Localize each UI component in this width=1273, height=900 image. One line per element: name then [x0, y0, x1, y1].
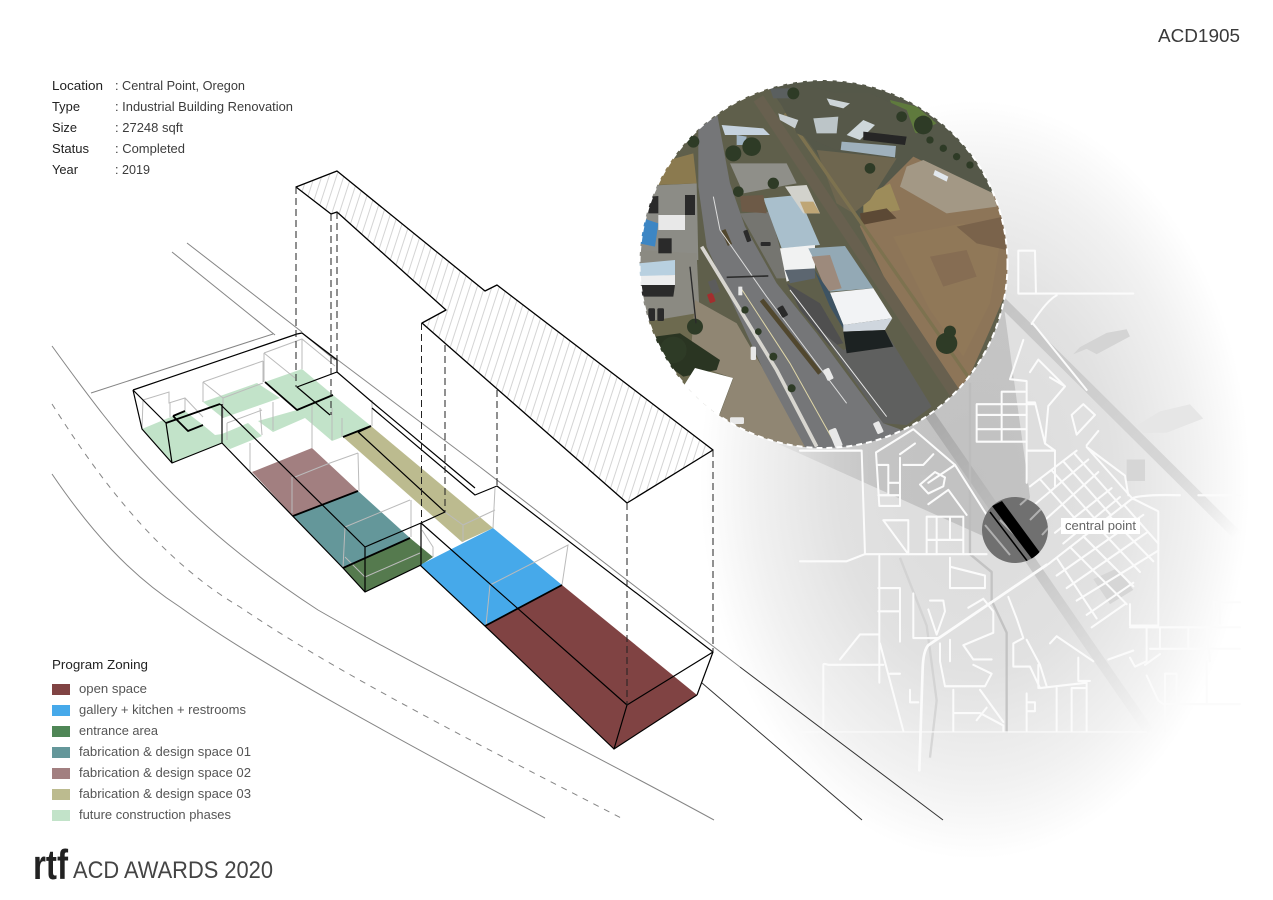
project information: Location	[52, 78, 103, 93]
dashed projection lines	[296, 187, 713, 705]
site context lines	[52, 243, 943, 820]
project information: : Completed	[115, 141, 185, 156]
zone: fabrication and design space 02	[252, 448, 358, 516]
legend item: entrance area: entrance area	[79, 723, 159, 738]
legend item: fabrication 02: fabrication & design space 02	[79, 765, 251, 780]
project information: Type	[52, 99, 80, 114]
map label: central point: central point	[1065, 519, 1137, 533]
aerial photograph	[640, 80, 1008, 449]
building outline	[133, 333, 713, 749]
map highways and creek	[900, 300, 1237, 758]
legend item: fabrication 03: fabrication & design space 03	[79, 786, 251, 801]
project information: Size	[52, 120, 77, 135]
location marker	[982, 497, 1048, 563]
legend item: open space: open space	[79, 681, 147, 696]
project information: : 27248 sqft	[115, 120, 183, 135]
zone: future construction phases	[142, 369, 371, 463]
project title code: ACD1905	[1158, 25, 1240, 46]
legend: program zoning	[52, 657, 251, 822]
footer logo: rtf: rtf	[33, 841, 69, 888]
project information	[52, 78, 293, 177]
project information: Year	[52, 162, 79, 177]
map: central point street map	[732, 145, 1232, 816]
legend item: fabrication 01: fabrication & design space 01	[79, 744, 251, 759]
photo cut-out for roof plan	[684, 368, 733, 416]
program zoning: floor zones	[142, 369, 697, 749]
map roads	[800, 251, 1240, 770]
zone: fabrication and design space 03	[343, 426, 493, 542]
zone: fabrication and design space 01	[293, 491, 410, 568]
light wireframe of interior volumes	[142, 333, 568, 625]
project information: : 2019	[115, 162, 150, 177]
project information: Status	[52, 141, 89, 156]
zone: open space	[485, 585, 697, 749]
legend item: future phases: future construction phases	[79, 807, 231, 822]
zone: entrance area	[343, 538, 433, 592]
map view cone	[725, 300, 1030, 545]
hatched roof plan	[296, 171, 713, 503]
footer text: ACD AWARDS 2020: ACD AWARDS 2020	[73, 857, 273, 884]
legend heading: Program Zoning	[52, 657, 148, 672]
photo dashed border	[640, 80, 1008, 448]
zone: gallery kitchen restrooms	[420, 528, 562, 626]
project information: : Industrial Building Renovation	[115, 99, 293, 114]
legend item: gallery: gallery + kitchen + restrooms	[79, 702, 246, 717]
project information: : Central Point, Oregon	[115, 78, 245, 93]
